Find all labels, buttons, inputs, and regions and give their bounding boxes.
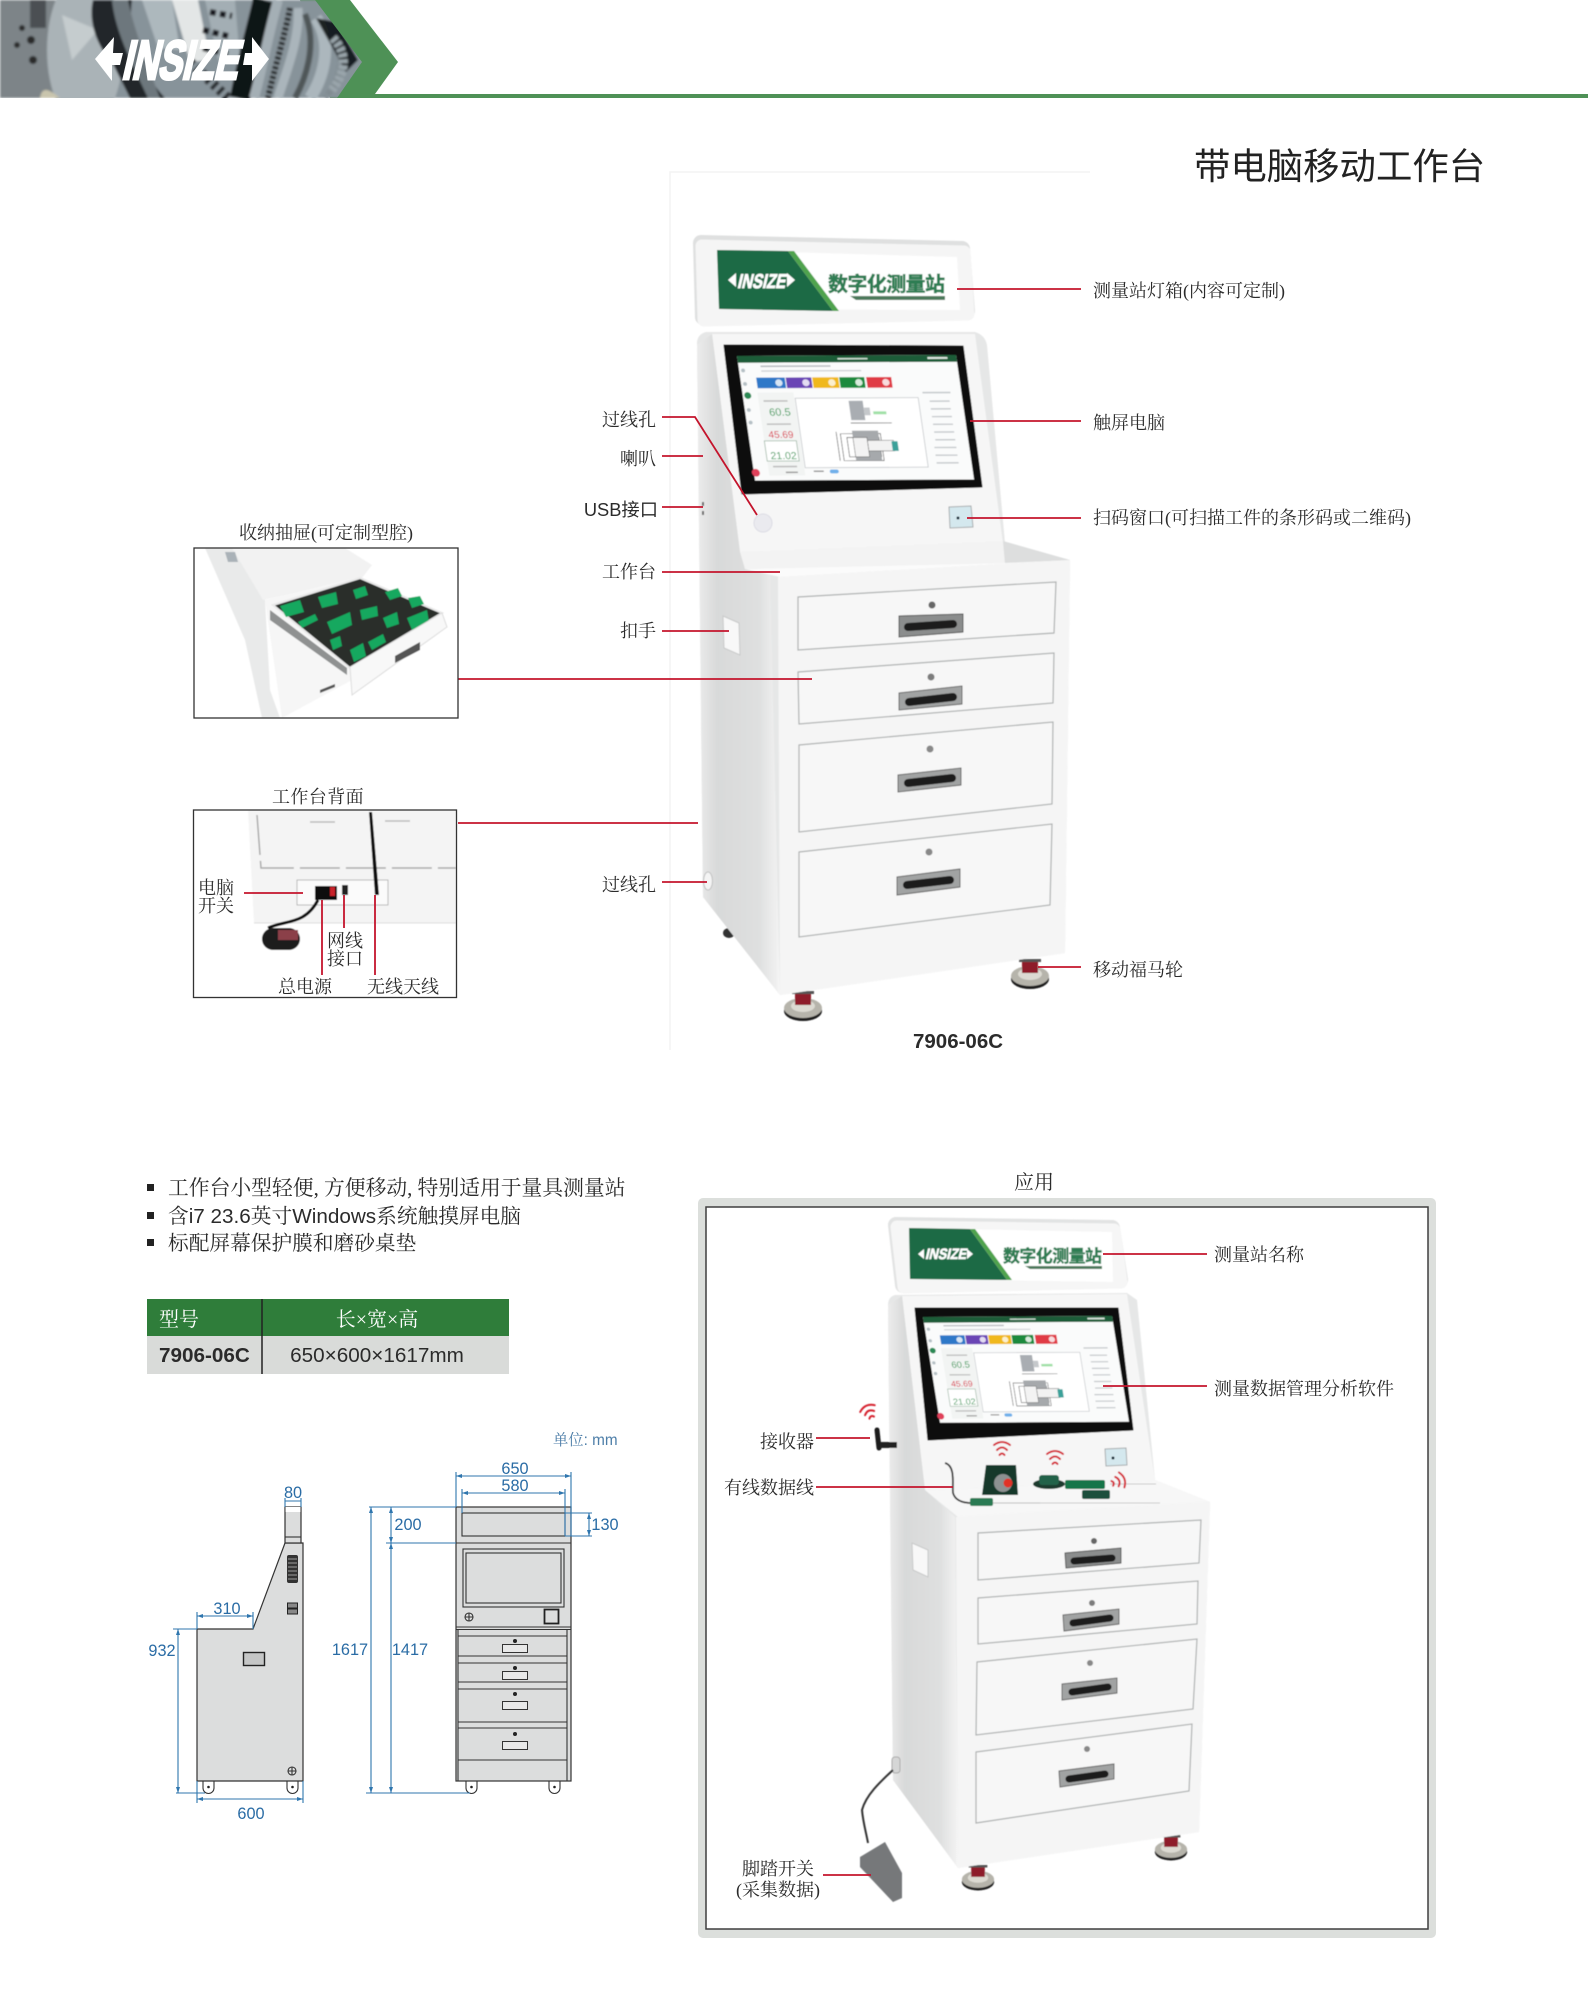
application labels: 脚踏开关 bbox=[742, 1859, 814, 1879]
application labels: 接收器 bbox=[760, 1432, 814, 1452]
drawer inset heading: 收纳抽屉(可定制型腔) bbox=[239, 523, 413, 544]
data cable and gauge bbox=[945, 1463, 1040, 1506]
side dimensions: 600 bbox=[237, 1805, 265, 1823]
spec table: 650×600×1617mm bbox=[290, 1344, 464, 1367]
spec table: 长×宽×高 bbox=[336, 1308, 418, 1331]
callout labels: main cabinet: 扣手 bbox=[620, 621, 656, 641]
touchscreen bezel bbox=[724, 345, 982, 494]
callout labels: main cabinet: 移动福马轮 bbox=[1093, 960, 1183, 980]
front dimensions: 650 bbox=[501, 1460, 529, 1478]
wifi icons bbox=[859, 1402, 1127, 1491]
side latch bbox=[723, 616, 740, 655]
lightbox: INSIZE bbox=[736, 271, 789, 293]
sloped screen face bbox=[712, 334, 1003, 552]
spec table bbox=[147, 1299, 509, 1374]
application labels: (采集数据) bbox=[736, 1880, 820, 1901]
wireless caliper bbox=[1040, 1480, 1160, 1503]
touchscreen UI: 60.5 bbox=[768, 407, 792, 419]
drawer 2 bbox=[978, 1581, 1198, 1644]
desk tray bbox=[740, 541, 1070, 577]
header green chevron and rule bbox=[300, 0, 1588, 98]
front dimensions bbox=[332, 1460, 619, 1793]
callout labels: main cabinet: USB接口 bbox=[584, 499, 658, 520]
callout labels: main cabinet: 喇叭 bbox=[620, 449, 656, 469]
lightbox bbox=[701, 243, 968, 320]
receiver antenna bbox=[877, 1430, 897, 1448]
touchscreen UI: 60.5 bbox=[951, 1360, 971, 1370]
application panel bbox=[698, 1198, 1436, 1938]
callout labels: main cabinet: 触屏电脑 bbox=[1093, 413, 1165, 433]
feature bullets: 含i7 23.6英寸Windows系统触摸屏电脑 bbox=[168, 1205, 521, 1228]
application callouts bbox=[816, 1254, 1207, 1875]
drawer inset frame bbox=[194, 548, 458, 718]
wheel front bbox=[784, 991, 822, 1021]
wireless sensor bbox=[1033, 1475, 1065, 1489]
callout labels: main cabinet bbox=[584, 281, 1411, 980]
touchscreen UI: 21.02 bbox=[952, 1397, 977, 1407]
drawer 3 bbox=[976, 1639, 1197, 1735]
drawer 1 bbox=[978, 1520, 1201, 1580]
wireless indicator bbox=[982, 1465, 1018, 1495]
touchscreen UI: 45.69 bbox=[768, 430, 795, 441]
drawer inset photo bbox=[194, 548, 457, 718]
touchscreen UI bbox=[921, 1316, 1129, 1423]
cabinet side face bbox=[697, 334, 780, 995]
feature bullets bbox=[147, 1177, 626, 1255]
foot pedal cable hole bbox=[892, 1757, 900, 1773]
faint product photo frame bbox=[670, 172, 1090, 1050]
drawer 1 bbox=[798, 582, 1056, 650]
desk top bbox=[925, 1480, 1210, 1517]
unit note: 单位: mm bbox=[553, 1432, 618, 1449]
drawer 3 bbox=[799, 722, 1053, 832]
model number: 7906-06C bbox=[913, 1030, 1003, 1053]
callout lines: main cabinet bbox=[458, 289, 1081, 967]
front dimensions: 200 bbox=[394, 1516, 422, 1534]
foot pedal bbox=[860, 1770, 902, 1902]
application labels: 有线数据线 bbox=[724, 1478, 814, 1498]
callout labels: main cabinet: 过线孔 bbox=[602, 410, 656, 430]
application heading: 应用 bbox=[1014, 1171, 1054, 1194]
drawer 4 bbox=[799, 824, 1052, 937]
lightbox: 数字化测量站 bbox=[828, 272, 945, 296]
sloped face bbox=[902, 1294, 1155, 1490]
rear view inset bbox=[194, 787, 456, 998]
rear view labels: 无线天线 bbox=[367, 977, 439, 997]
front outline bbox=[456, 1507, 571, 1794]
touchscreen UI bbox=[735, 355, 974, 480]
table header bbox=[147, 1299, 509, 1336]
rear view labels: 开关 bbox=[198, 896, 234, 916]
rear view labels: 总电源 bbox=[278, 977, 333, 997]
panel frame bbox=[698, 1198, 1436, 1938]
callout labels: main cabinet: 测量站灯箱(内容可定制) bbox=[1093, 281, 1285, 302]
cabinet silhouette bbox=[697, 332, 1070, 995]
application labels: 测量数据管理分析软件 bbox=[1214, 1379, 1394, 1399]
front dimensions: 1417 bbox=[392, 1641, 428, 1659]
callout labels: main cabinet: 扫码窗口(可扫描工件的条形码或二维码) bbox=[1093, 508, 1411, 529]
rear view heading: 工作台背面 bbox=[272, 787, 364, 807]
rear view labels: 网线 bbox=[327, 931, 363, 951]
title: 带电脑移动工作台 bbox=[1194, 146, 1485, 187]
application labels bbox=[724, 1245, 1394, 1901]
front view dimension drawing bbox=[332, 1460, 619, 1794]
drawer 4 bbox=[976, 1724, 1192, 1823]
lightbox: INSIZE bbox=[924, 1246, 969, 1263]
side dimensions bbox=[148, 1484, 303, 1823]
lightbox bbox=[896, 1225, 1121, 1287]
header banner bbox=[0, 0, 1588, 98]
touchscreen UI: 21.02 bbox=[770, 451, 798, 462]
cabinet front bbox=[778, 560, 1070, 995]
front face bbox=[956, 1502, 1210, 1868]
cabinet silhouette bbox=[888, 1293, 1210, 1868]
header machinery photo bbox=[0, 0, 362, 98]
side latch bbox=[912, 1543, 928, 1577]
rear view callouts bbox=[244, 893, 375, 975]
drawer inset bbox=[194, 523, 458, 718]
feature bullets: 标配屏幕保护膜和磨砂桌垫 bbox=[168, 1232, 416, 1255]
drawer 2 bbox=[798, 653, 1054, 724]
side dimensions: 310 bbox=[213, 1600, 241, 1618]
scan window bbox=[949, 506, 973, 528]
table row bbox=[147, 1336, 509, 1374]
USB port bbox=[702, 502, 704, 515]
rear view frame bbox=[194, 810, 456, 998]
front dimensions: 1617 bbox=[332, 1641, 368, 1659]
lightbox: 数字化测量站 bbox=[1003, 1246, 1102, 1266]
rear view photo bbox=[248, 811, 456, 951]
application cabinet bbox=[859, 1225, 1210, 1902]
front dimensions: 130 bbox=[591, 1516, 619, 1534]
side dimensions: 932 bbox=[148, 1642, 176, 1660]
rear view labels bbox=[198, 878, 439, 997]
side outline bbox=[197, 1507, 303, 1794]
speaker hole bbox=[754, 514, 772, 532]
front dimensions: 580 bbox=[501, 1477, 529, 1495]
callout labels: main cabinet: 工作台 bbox=[602, 562, 656, 582]
side dimensions: 80 bbox=[284, 1484, 302, 1502]
wheel right rear bbox=[1011, 959, 1049, 989]
rear view labels: 电脑 bbox=[198, 878, 234, 898]
side face bbox=[888, 1296, 958, 1868]
scan window bbox=[1105, 1448, 1127, 1466]
cable hole bbox=[704, 872, 712, 890]
side view dimension drawing bbox=[148, 1484, 303, 1823]
application labels: 测量站名称 bbox=[1214, 1245, 1305, 1265]
wheels bbox=[1155, 1835, 1187, 1860]
touchscreen UI: 45.69 bbox=[950, 1379, 974, 1389]
main cabinet photo bbox=[697, 243, 1070, 1021]
touchscreen bezel bbox=[915, 1308, 1133, 1440]
callout labels: main cabinet: 过线孔 bbox=[602, 875, 656, 895]
spec table: 型号 bbox=[159, 1308, 199, 1331]
spec table: 7906-06C bbox=[159, 1344, 250, 1367]
feature bullets: 工作台小型轻便, 方便移动, 特别适用于量具测量站 bbox=[168, 1177, 626, 1200]
INSIZE logo: INSIZE bbox=[118, 30, 248, 91]
rear view labels: 接口 bbox=[327, 949, 363, 969]
rear wheel bbox=[723, 928, 735, 938]
